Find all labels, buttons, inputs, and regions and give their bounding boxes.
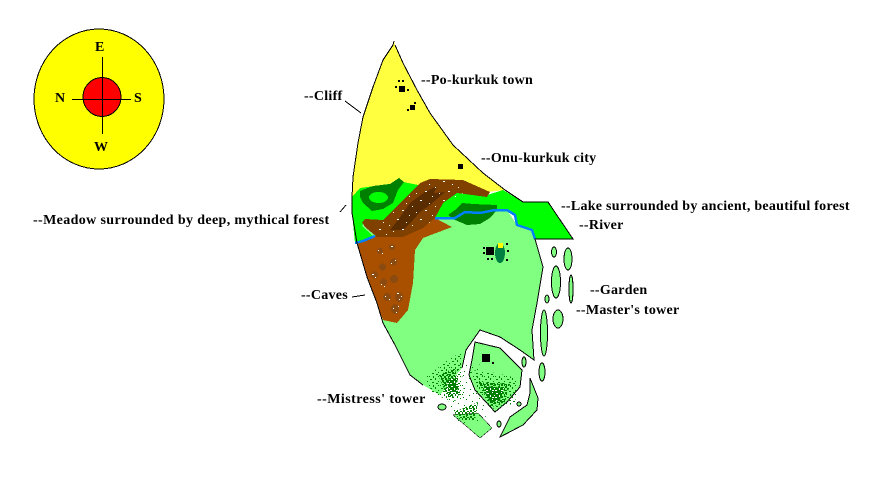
light green central land: [352, 205, 543, 395]
label: Onu-kurkuk city: --Onu-kurkuk city: [481, 151, 596, 166]
compass letter W: W: [94, 140, 108, 155]
ridge snow specks: [365, 179, 470, 237]
compass letter N: N: [55, 91, 65, 106]
compass letter E: E: [95, 40, 105, 55]
meadow bright green: [352, 182, 418, 243]
lake forest bright green: [428, 190, 573, 239]
cave mounds: [371, 244, 403, 314]
yellow northern plain: [352, 41, 505, 200]
southern island pieces: [469, 342, 522, 412]
garden ellipses: [438, 247, 573, 427]
label: Master's tower: --Master's tower: [576, 303, 679, 318]
Onu-kurkuk city marker: [458, 164, 463, 169]
cave land brown: [355, 218, 452, 323]
meadow forest ring: [360, 178, 404, 211]
label: Garden: --Garden: [590, 283, 647, 298]
river: [355, 210, 535, 243]
label: Mistress' tower: --Mistress' tower: [317, 392, 426, 407]
mountain peaks dark: [390, 186, 445, 230]
Po-kurkuk town markers: [395, 80, 416, 111]
compass letter S: S: [134, 91, 142, 106]
garden pond: [495, 243, 505, 263]
speckled forest: [445, 360, 486, 425]
label: Caves: --Caves: [301, 288, 348, 303]
label: Po-kurkuk town: --Po-kurkuk town: [421, 73, 533, 88]
leader lines: [340, 101, 365, 297]
label: Cliff: --Cliff: [304, 89, 342, 104]
cave specks: [372, 246, 402, 313]
compass disc: [34, 29, 164, 169]
Mistress' tower marker: [482, 354, 494, 364]
label: Lake: --Lake surrounded by ancient, beautiful forest: [561, 199, 850, 214]
compass rose: [34, 29, 164, 169]
lake forest: [448, 203, 497, 225]
yellow tower top: [498, 243, 503, 248]
tower square: [486, 247, 494, 255]
mountain ridge: [362, 179, 490, 237]
Master's tower: [483, 243, 509, 263]
label: Meadow: --Meadow surrounded by deep, mythical forest: [33, 213, 330, 228]
tower dots: [483, 243, 509, 261]
island map: [352, 41, 573, 438]
compass centre: [83, 78, 121, 116]
white path fill: [440, 330, 534, 437]
label: River: --River: [579, 218, 624, 233]
compass cross: [72, 57, 131, 134]
map outlines: [352, 41, 573, 385]
